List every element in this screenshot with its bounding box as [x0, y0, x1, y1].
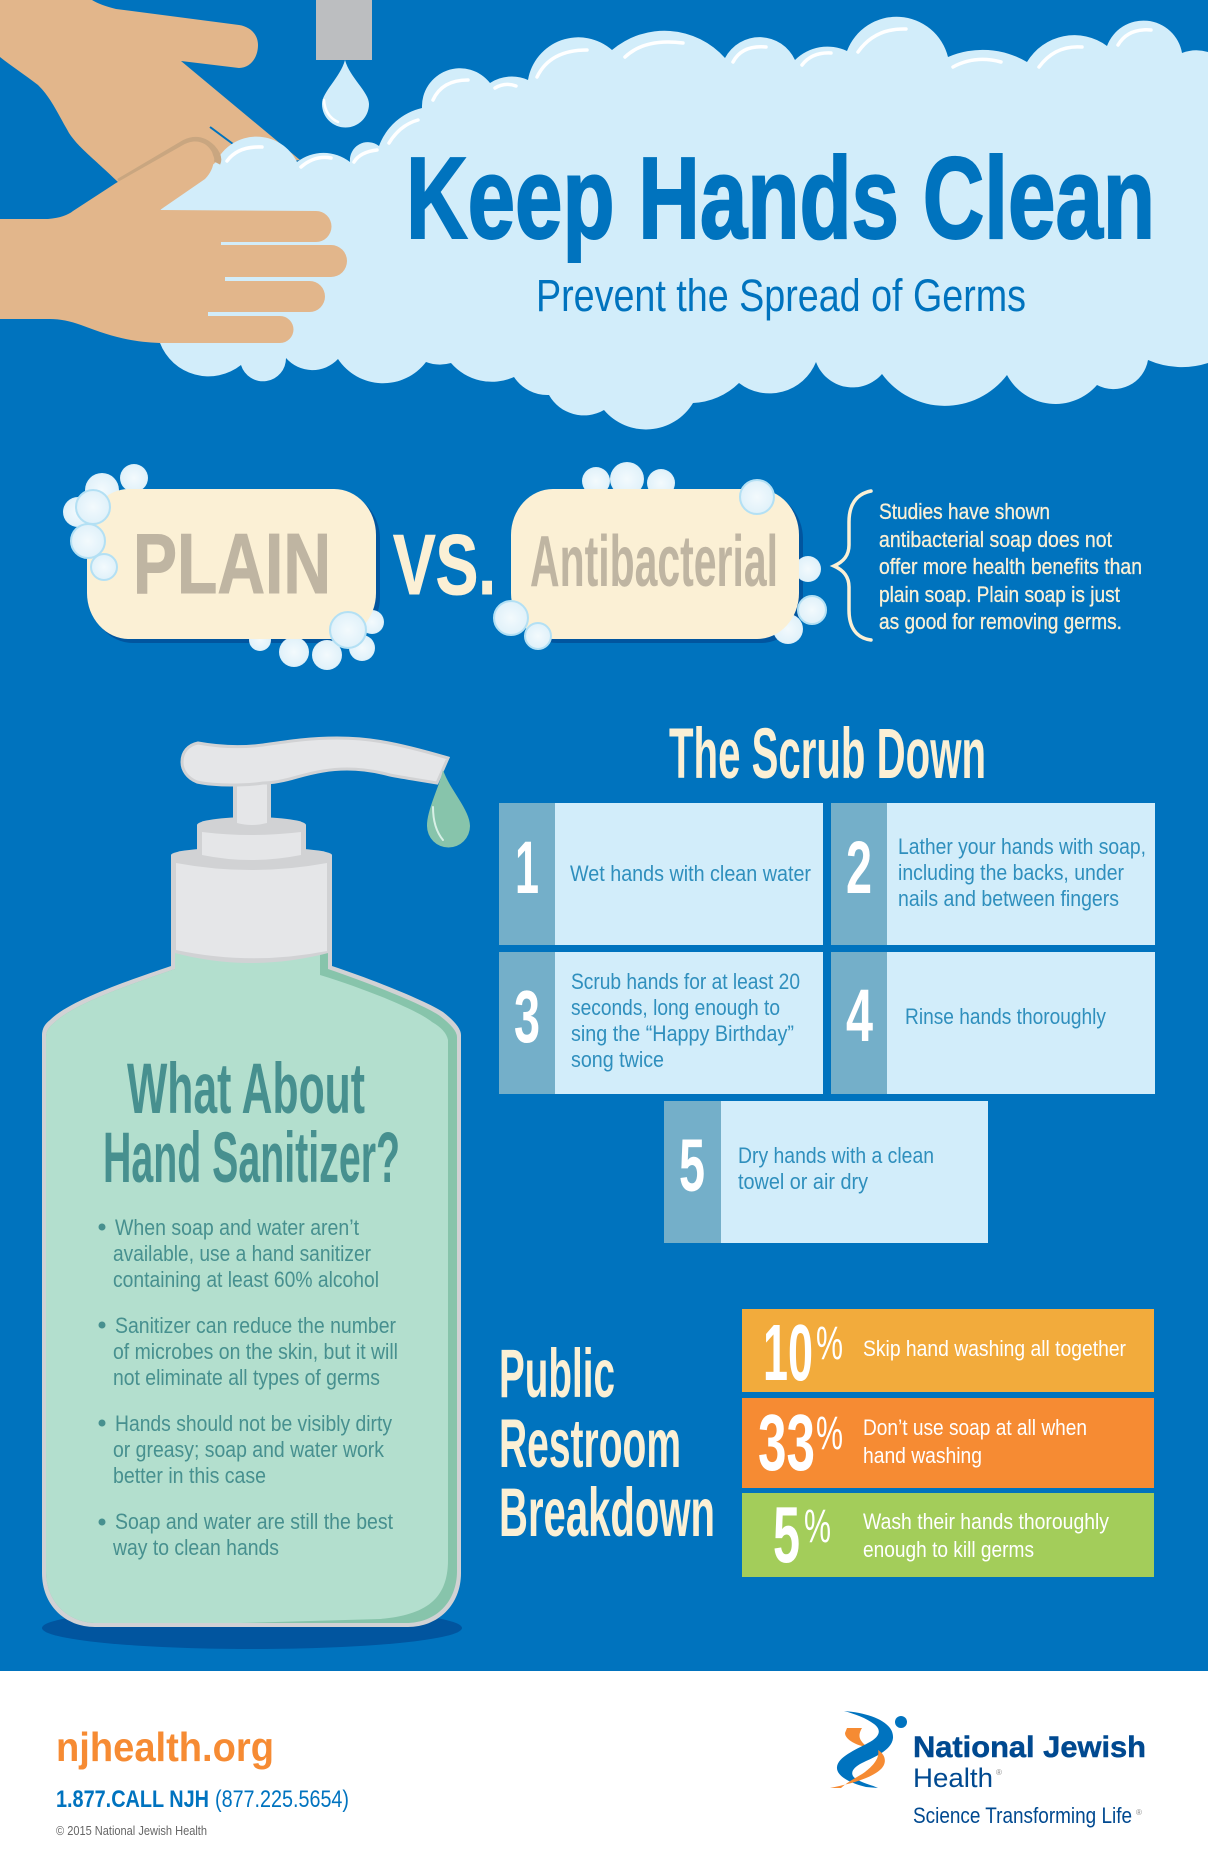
pump collar [197, 817, 306, 833]
pump spout [182, 738, 448, 785]
icon: upper hand [0, 0, 300, 183]
step 1 card [499, 803, 823, 945]
step 2 card: Lather your hands with soap, [898, 834, 1146, 859]
logo: national jewish health [830, 1711, 1146, 1828]
logo: national jewish health: ® [1136, 1808, 1142, 1817]
soap comparison text [879, 499, 1142, 634]
stat bar: 5 percent: % [804, 1499, 831, 1552]
phone number [56, 1786, 349, 1813]
label: plain: PLAIN [133, 517, 331, 612]
bullet 4: Soap and water are still the best [115, 1509, 393, 1534]
step 4 card: 4 [846, 974, 873, 1057]
bullet 3 [98, 1411, 392, 1488]
bullet 4 [98, 1509, 393, 1560]
step 3 card: seconds, long enough to [571, 995, 780, 1020]
step 3 card: Scrub hands for at least 20 [571, 969, 800, 994]
bullet 2: Sanitizer can reduce the number [115, 1313, 396, 1338]
step 3 card [499, 952, 823, 1094]
stat bar: 10 percent: Skip hand washing all together [863, 1336, 1126, 1361]
bottle shadow [42, 1607, 462, 1649]
step 1 card: Wet hands with clean water [570, 861, 811, 886]
heading: what about hand sanitizer: Hand Sanitizer? [103, 1119, 400, 1198]
icon: sanitizer drop [427, 770, 470, 848]
stat bar: 33 percent: 33 [758, 1398, 815, 1487]
website: njhealth.org [56, 1724, 274, 1770]
soap comparison text: as good for removing germs. [879, 609, 1122, 634]
step 4 card [831, 952, 1155, 1094]
label: antibacterial: Antibacterial [530, 522, 778, 602]
stat bar: 33 percent [742, 1398, 1154, 1488]
heading: what about hand sanitizer [103, 1050, 400, 1198]
stat bar: 10 percent: % [816, 1316, 843, 1369]
icon: logo mark [830, 1711, 907, 1788]
stat bar: 5 percent: 5 [773, 1490, 800, 1579]
bullet 4: way to clean hands [112, 1535, 279, 1560]
bullet 3: better in this case [113, 1463, 266, 1488]
logo: national jewish health: Science Transforming Life [913, 1803, 1132, 1828]
stat bar: 10 percent: 10 [763, 1308, 813, 1397]
bottle body [42, 950, 461, 1627]
stat bar: 5 percent: enough to kill germs [863, 1537, 1034, 1562]
subtitle: Prevent the Spread of Germs [536, 270, 1026, 321]
bubbles over plain bar [71, 490, 366, 648]
step 3 card: sing the “Happy Birthday” [571, 1021, 794, 1046]
finger gap line [210, 127, 233, 144]
soap suds cloud [160, 17, 1208, 429]
bullet 2: not eliminate all types of germs [113, 1365, 380, 1390]
suds highlights [227, 29, 1151, 167]
logo: national jewish health: Health [913, 1763, 993, 1793]
step 2 card: nails and between fingers [898, 886, 1119, 911]
bullet 1: containing at least 60% alcohol [113, 1267, 379, 1292]
phone number: (877.225.5654) [215, 1786, 349, 1813]
step 2 card [831, 803, 1155, 945]
bubbles behind antibacterial bar [582, 462, 821, 644]
heading: public restroom breakdown: Breakdown [499, 1474, 715, 1551]
heading: public restroom breakdown [499, 1335, 715, 1551]
stat bar: 10 percent [742, 1308, 1154, 1397]
bullet 1 [98, 1215, 379, 1292]
step 2 card: 2 [846, 826, 872, 909]
heading: public restroom breakdown: Public [499, 1335, 615, 1412]
icon: water drop [322, 60, 369, 128]
soap comparison text: Studies have shown [879, 499, 1050, 524]
bubbles over antibacterial bar [494, 480, 826, 649]
phone number: 1.877.CALL NJH [56, 1786, 209, 1813]
step 5 card: 5 [679, 1124, 705, 1207]
bottle neck [171, 855, 332, 963]
bullet 1: available, use a hand sanitizer [113, 1241, 371, 1266]
icon: faucet [316, 0, 372, 60]
stat bar: 33 percent: hand washing [863, 1443, 982, 1468]
soap comparison text: plain soap. Plain soap is just [879, 582, 1120, 607]
bullet 2: of microbes on the skin, but it will [113, 1339, 398, 1364]
step 5 card: Dry hands with a clean [738, 1143, 934, 1168]
logo: national jewish health: National Jewish [913, 1731, 1146, 1764]
soap comparison text: antibacterial soap does not [879, 527, 1112, 552]
sanitizer bullet list [98, 1215, 398, 1560]
step 3 card: song twice [571, 1047, 664, 1072]
bullet 3: Hands should not be visibly dirty [115, 1411, 392, 1436]
header illustration: hands, faucet and suds [0, 0, 1208, 429]
step 1 card: 1 [515, 826, 539, 909]
stat bar: 5 percent [742, 1490, 1154, 1579]
heading: public restroom breakdown: Restroom [499, 1405, 681, 1482]
step 2 card: including the backs, under [898, 860, 1124, 885]
thumb outline [119, 140, 218, 182]
antibacterial soap bar [494, 462, 826, 649]
step 5 card: towel or air dry [738, 1169, 868, 1194]
stat bar: 33 percent: % [816, 1406, 843, 1459]
stat bar: 5 percent: Wash their hands thoroughly [863, 1509, 1109, 1534]
step 3 card: 3 [514, 975, 540, 1058]
bubbles behind plain bar [63, 464, 384, 670]
plain soap bar [63, 464, 384, 670]
footer panel [0, 1671, 1208, 1871]
icon: lower hand [0, 141, 347, 343]
pump stem [233, 775, 271, 826]
logo: national jewish health: ® [996, 1768, 1002, 1777]
heading: what about hand sanitizer: What About [127, 1050, 365, 1129]
stat bar: 33 percent: Don’t use soap at all when [863, 1415, 1087, 1440]
copyright: © 2015 National Jewish Health [56, 1823, 207, 1838]
bullet 1: When soap and water aren’t [115, 1215, 359, 1240]
vs label: VS. [393, 518, 496, 613]
bracket [834, 491, 871, 640]
bullet 2 [98, 1313, 398, 1390]
step 5 card [664, 1101, 988, 1243]
soap comparison text: offer more health benefits than [879, 554, 1142, 579]
illustration: sanitizer pump bottle [42, 738, 470, 1649]
step 4 card: Rinse hands thoroughly [905, 1004, 1106, 1029]
bullet 3: or greasy; soap and water work [113, 1437, 385, 1462]
